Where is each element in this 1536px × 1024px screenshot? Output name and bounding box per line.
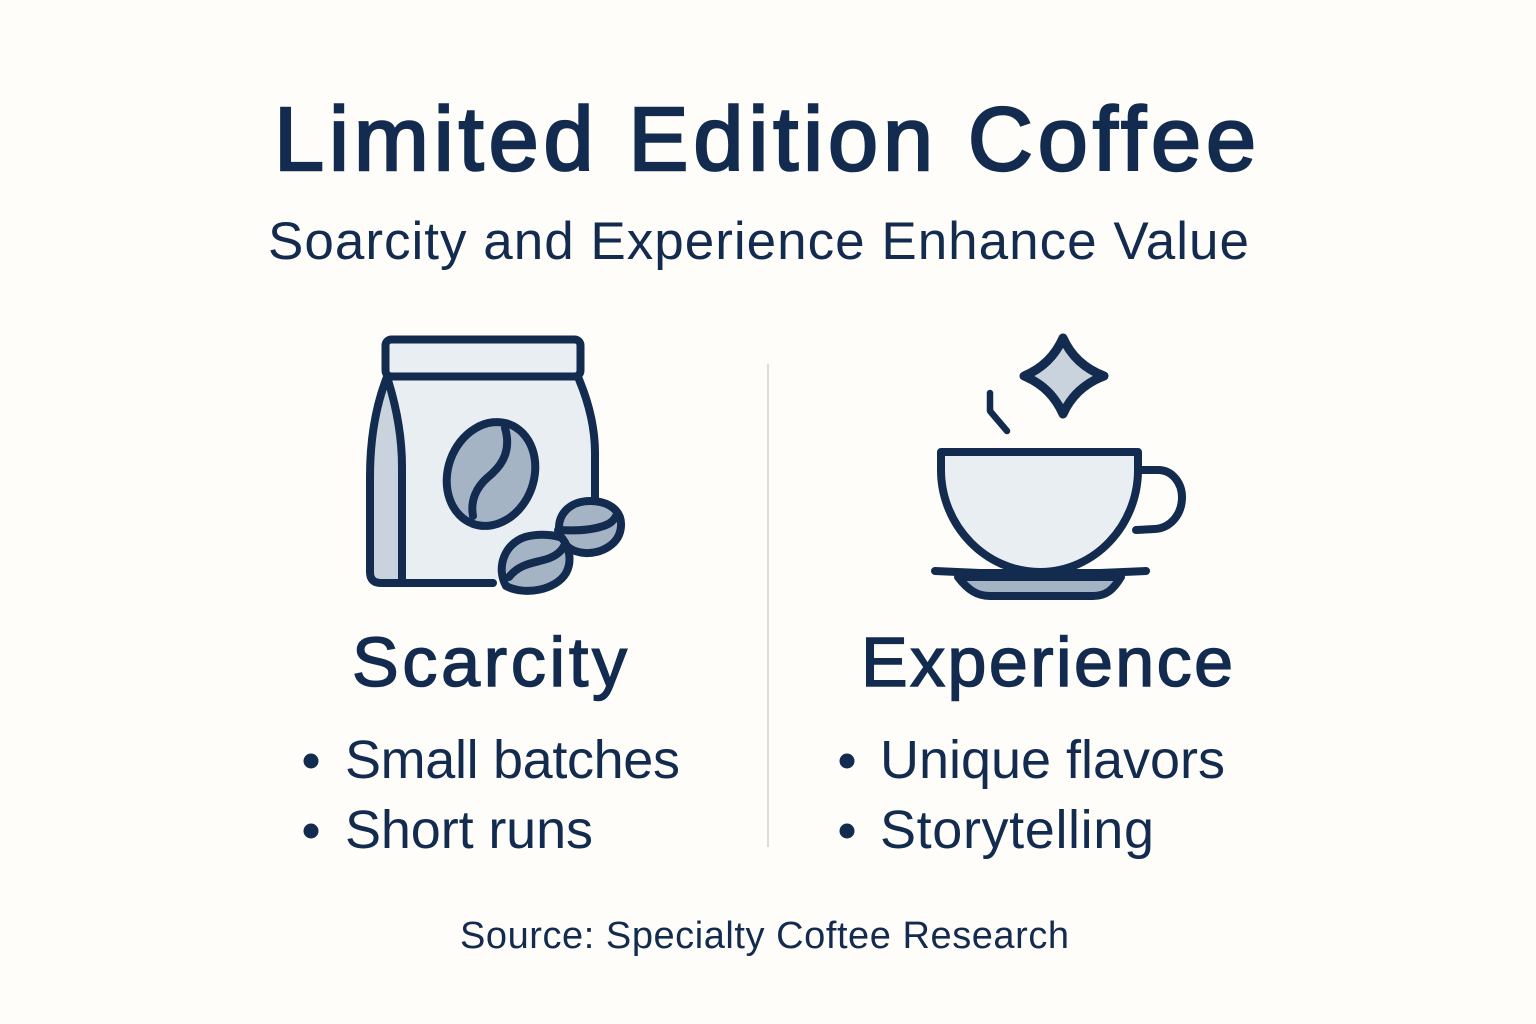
list: scarcity points bbox=[304, 730, 680, 860]
list: scarcity points: Small batches bbox=[345, 730, 680, 790]
heading: scarcity: Scarcity bbox=[352, 623, 627, 701]
heading: experience: Experience bbox=[861, 623, 1233, 701]
icon: sparkle bbox=[1024, 338, 1104, 414]
icon: coffee bag with beans bbox=[370, 340, 621, 591]
panel: experience bbox=[840, 338, 1233, 860]
panel: scarcity bbox=[304, 340, 680, 860]
list: experience points: Unique flavors bbox=[880, 730, 1225, 790]
title: Limited Edition Coffee bbox=[274, 90, 1256, 190]
list: scarcity points: Short runs bbox=[345, 800, 593, 860]
icon: large bean bbox=[432, 409, 550, 539]
icon: small beans bbox=[502, 501, 621, 591]
icon: steam bbox=[990, 393, 1007, 431]
icon: coffee cup with sparkle bbox=[935, 338, 1182, 596]
source note: Source: Specialty Coftee Research bbox=[460, 915, 1069, 957]
list: experience points: Storytelling bbox=[880, 800, 1154, 860]
subtitle: Soarcity and Experience Enhance Value bbox=[268, 212, 1249, 271]
list: experience points bbox=[840, 730, 1225, 860]
